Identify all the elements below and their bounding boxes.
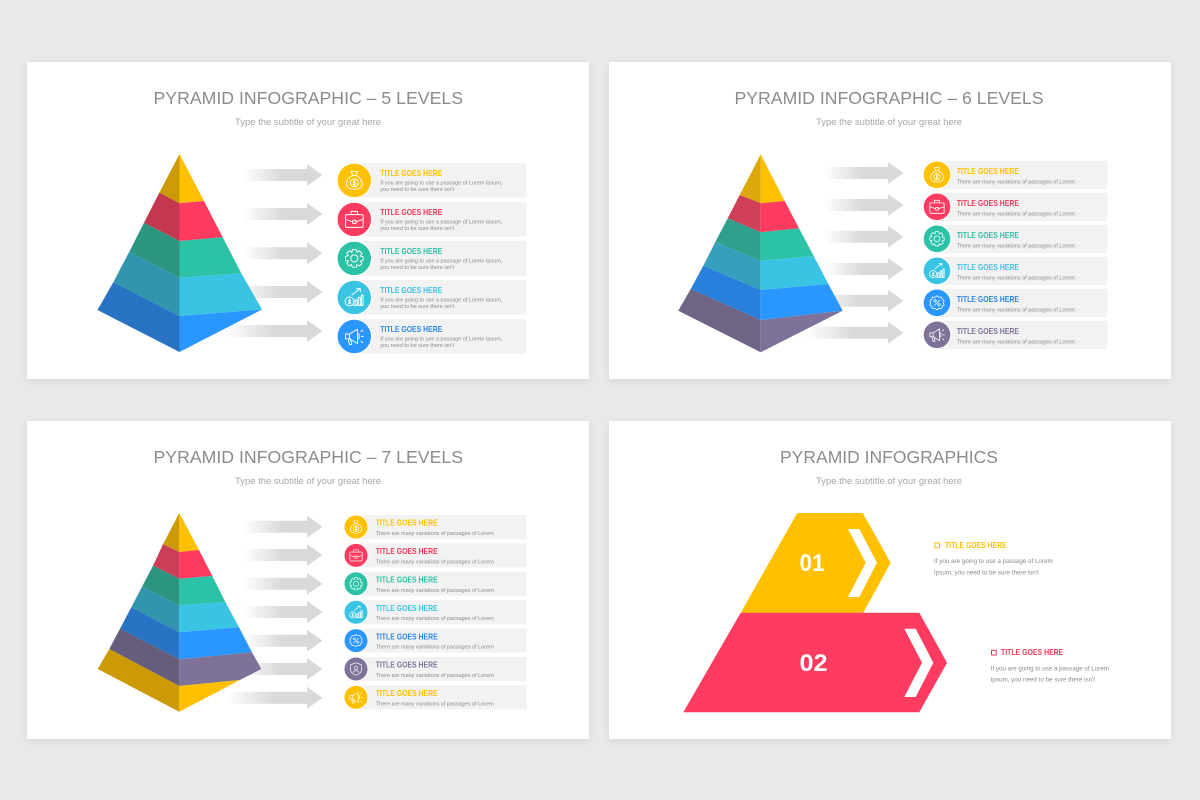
arrows — [226, 516, 322, 709]
row text: you need to be sure there isn't — [380, 304, 454, 310]
row 2 — [344, 543, 527, 567]
callout 02: TITLE GOES HERE — [1001, 647, 1064, 657]
subtitle: Type the subtitle of your great here — [235, 117, 381, 128]
icon: gear — [337, 241, 371, 276]
row title: TITLE GOES HERE — [376, 546, 438, 556]
row 1 — [344, 515, 527, 539]
row title: TITLE GOES HERE — [957, 198, 1019, 208]
row 3 — [344, 572, 527, 596]
callout 01: Ipsum, you need to be sure there isn't — [934, 569, 1039, 576]
row text: There are many variations of passages of Lorem — [376, 701, 494, 707]
icon: megaphone — [344, 685, 368, 709]
heading: 5 levels: PYRAMID INFOGRAPHIC – 5 LEVELS — [154, 88, 463, 108]
callout 01 — [934, 540, 1053, 576]
row 1 — [923, 161, 1108, 189]
row text: you need to be sure there isn't — [380, 343, 454, 349]
row text: There are many variations of passages of Lorem — [957, 243, 1075, 249]
icon: gear — [344, 572, 368, 596]
icon: gear — [923, 225, 951, 253]
row title: TITLE GOES HERE — [957, 262, 1019, 272]
row text: There are many variations of passages of Lorem — [957, 275, 1075, 281]
level 01 shape — [741, 513, 891, 613]
callout 01: TITLE GOES HERE — [945, 540, 1007, 550]
row text: you need to be sure there isn't — [380, 187, 454, 193]
row 3 — [337, 241, 527, 276]
row title: TITLE GOES HERE — [380, 246, 443, 256]
row title: TITLE GOES HERE — [376, 603, 438, 613]
row text: you need to be sure there isn't — [380, 226, 454, 232]
row 6 — [344, 657, 527, 681]
row text — [380, 220, 503, 232]
panel: 7 levels — [27, 421, 589, 739]
callout 01: If you are going to use a passage of Lorem — [934, 558, 1053, 565]
row title: TITLE GOES HERE — [376, 688, 438, 698]
row title: TITLE GOES HERE — [380, 207, 443, 217]
callout 02 — [991, 647, 1109, 684]
row 1 — [337, 163, 527, 198]
icon: growth chart — [337, 280, 371, 315]
row text — [380, 337, 503, 349]
icon: shield — [344, 657, 368, 681]
row text: If you are going to use a passage of Lorem Ipsum, — [380, 220, 503, 226]
pyramid: 7 levels — [98, 513, 261, 712]
pyramid: 5 levels — [98, 154, 262, 352]
row 4 — [344, 600, 527, 624]
row 5 — [337, 319, 527, 354]
row text: If you are going to use a passage of Lorem Ipsum, — [380, 181, 503, 187]
icon: money bag — [337, 163, 371, 198]
icon: briefcase — [344, 543, 368, 567]
row text: If you are going to use a passage of Lorem Ipsum, — [380, 298, 503, 304]
row text: There are many variations of passages of Lorem — [376, 531, 494, 537]
row text: If you are going to use a passage of Lorem Ipsum, — [380, 259, 503, 265]
row title: TITLE GOES HERE — [957, 230, 1019, 240]
row text: There are many variations of passages of Lorem — [376, 588, 494, 594]
row text — [380, 181, 503, 193]
icon: briefcase — [337, 202, 371, 237]
row text: There are many variations of passages of Lorem — [957, 307, 1075, 313]
subtitle: Type the subtitle of your great here — [816, 476, 962, 487]
row text: If you are going to use a passage of Lorem Ipsum, — [380, 337, 503, 343]
row 7 — [344, 685, 527, 709]
icon: growth chart — [344, 600, 368, 624]
row title: TITLE GOES HERE — [376, 660, 438, 670]
row 2 — [923, 193, 1108, 221]
row 2 — [337, 202, 527, 237]
icon: briefcase — [923, 193, 951, 221]
row text: There are many variations of passages of Lorem — [957, 211, 1075, 217]
subtitle: Type the subtitle of your great here — [816, 117, 962, 128]
row 5 — [923, 289, 1108, 317]
row text: There are many variations of passages of Lorem — [957, 179, 1075, 185]
level 01 shape: 01 — [800, 550, 824, 577]
callout 02: Ipsum, you need to be sure there isn't — [991, 677, 1095, 684]
panel: 6 levels — [609, 62, 1171, 379]
arrows — [225, 164, 322, 342]
row text: There are many variations of passages of Lorem — [376, 559, 494, 565]
row title: TITLE GOES HERE — [380, 168, 443, 178]
heading: pyramid infographics: PYRAMID INFOGRAPHICS — [780, 447, 998, 467]
pyramid: 6 levels — [678, 154, 843, 352]
row 3 — [923, 225, 1108, 253]
arrows — [805, 162, 904, 344]
panel: pyramid infographics — [609, 421, 1171, 739]
row 4 — [923, 257, 1108, 285]
row text: There are many variations of passages of Lorem — [376, 673, 494, 679]
row text — [380, 259, 503, 271]
row text: There are many variations of passages of Lorem — [376, 645, 494, 651]
heading: 7 levels: PYRAMID INFOGRAPHIC – 7 LEVELS — [154, 447, 463, 467]
row 6 — [923, 321, 1108, 349]
heading: 6 levels: PYRAMID INFOGRAPHIC – 6 LEVELS — [734, 88, 1044, 108]
icon: money bag — [923, 161, 951, 189]
row title: TITLE GOES HERE — [957, 326, 1019, 336]
row title: TITLE GOES HERE — [376, 574, 438, 584]
panel: 5 levels — [27, 62, 589, 379]
level 02 shape: 02 — [800, 650, 828, 677]
row title: TITLE GOES HERE — [957, 294, 1019, 304]
row text: There are many variations of passages of Lorem — [957, 339, 1075, 345]
row 5 — [344, 629, 527, 653]
row text: you need to be sure there isn't — [380, 265, 454, 271]
icon: percent badge — [344, 629, 368, 653]
icon: percent badge — [923, 289, 951, 317]
icon: megaphone — [337, 319, 371, 354]
icon: money bag — [344, 515, 368, 539]
row title: TITLE GOES HERE — [376, 518, 438, 528]
level 02 shape — [683, 613, 947, 712]
icon: megaphone — [923, 321, 951, 349]
subtitle: Type the subtitle of your great here — [235, 476, 381, 487]
icon: growth chart — [923, 257, 951, 285]
row 4 — [337, 280, 527, 315]
row title: TITLE GOES HERE — [380, 285, 443, 295]
callout 02: If you are going to use a passage of Lorem — [991, 665, 1109, 672]
row text — [380, 298, 503, 310]
row title: TITLE GOES HERE — [957, 166, 1019, 176]
row title: TITLE GOES HERE — [380, 324, 443, 334]
row text: There are many variations of passages of Lorem — [376, 616, 494, 622]
row title: TITLE GOES HERE — [376, 631, 438, 641]
